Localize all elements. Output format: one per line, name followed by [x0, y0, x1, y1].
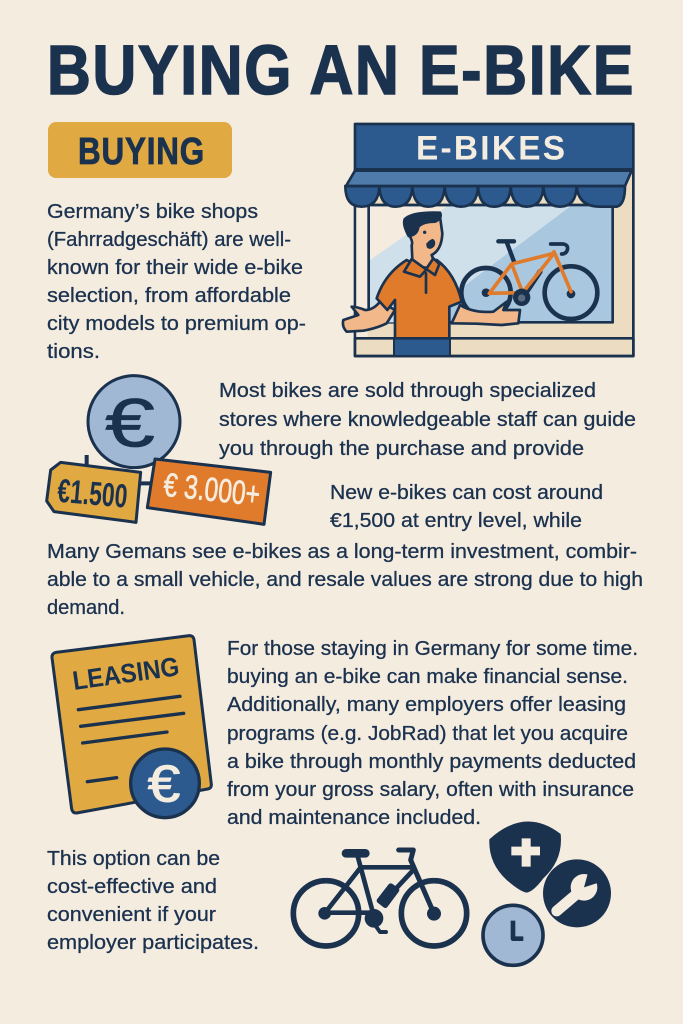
text block: long-term investment: Many Gemans see e-bikes as a long-term investment, combir-: [47, 540, 637, 563]
icon: leasing document with euro coin: [52, 636, 211, 818]
text block: bike shops: tions.: [47, 340, 100, 363]
icon: clock: [483, 905, 543, 965]
text block: employer leasing: from your gross salary, often with insurance: [227, 778, 634, 801]
text block: employer leasing: [227, 637, 638, 829]
shop wall: [355, 170, 633, 356]
shop window: [369, 205, 613, 322]
heading badge: buying: [48, 122, 232, 178]
euro coin: €: [105, 386, 155, 462]
price tag: 1.500: [47, 462, 141, 522]
euro coin: [88, 376, 180, 468]
price tag: 3.000+: € 3.000+: [162, 467, 262, 514]
text block: cost: New e-bikes can cost around: [330, 481, 603, 504]
text block: employer leasing: a bike through monthly payments deducted: [227, 750, 636, 773]
icon: wrench: [543, 859, 611, 927]
leasing label: LEASING: [71, 651, 181, 696]
salesman head: [404, 213, 442, 268]
salesman shirt: [377, 258, 462, 338]
text block: employer leasing: programs (e.g. JobRad) that let you acquire: [227, 722, 628, 745]
text block: cost-effective option: This option can be: [47, 847, 220, 870]
orange bicycle: [461, 241, 597, 319]
euro coin: [131, 749, 199, 818]
text block: long-term investment: demand.: [47, 596, 125, 619]
price tag: 1.500: €1.500: [56, 473, 129, 516]
shop sill: [355, 338, 633, 356]
document: [52, 636, 211, 813]
awning: [345, 171, 632, 207]
text block: long-term investment: able to a small vehicle, and resale values are strong due to high: [47, 568, 643, 591]
text block: employer leasing: buying an e-bike can make financial sense.: [227, 665, 628, 688]
text block: specialized stores: [219, 379, 636, 460]
text block: bike shops: known for their wide e-bike: [47, 256, 303, 279]
illustration: e-bike shop with salesman: [343, 124, 633, 356]
text block: bike shops: (Fahrradgeschäft) are well-: [47, 228, 291, 251]
salesman arms: [343, 302, 520, 332]
text block: bike shops: selection, from affordable: [47, 284, 291, 307]
icon: euro coin and price tags: [47, 376, 271, 524]
price tag: 3.000+: [147, 459, 271, 524]
text block: specialized stores: you through the purchase and provide: [219, 437, 584, 460]
text block: cost-effective option: [47, 847, 259, 954]
text block: employer leasing: Additionally, many employers offer leasing: [227, 693, 626, 716]
text block: cost: €1,500 at entry level, while: [330, 509, 582, 532]
icon: shield with plus: [489, 822, 561, 893]
text block: cost-effective option: convenient if your: [47, 903, 216, 926]
heading badge: buying: BUYING: [78, 131, 205, 173]
text block: cost: [330, 481, 603, 532]
icon: navy e-bike: [293, 850, 467, 946]
text block: bike shops: Germany’s bike shops: [47, 200, 258, 223]
text block: employer leasing: and maintenance included.: [227, 806, 481, 829]
shop sign: [355, 124, 633, 169]
euro coin: €: [148, 755, 180, 813]
salesman: [343, 213, 520, 338]
text block: bike shops: city models to premium op-: [47, 312, 306, 335]
text block: cost-effective option: cost-effective and: [47, 875, 217, 898]
text block: bike shops: [47, 200, 306, 363]
text block: employer leasing: For those staying in Germany for some time.: [227, 637, 638, 660]
text block: specialized stores: Most bikes are sold through specialized: [219, 379, 596, 402]
text block: long-term investment: [47, 540, 643, 619]
text block: cost-effective option: employer participates.: [47, 931, 259, 954]
shop sign: E-BIKES: [416, 129, 567, 167]
text block: specialized stores: stores where knowledgeable staff can guide: [219, 408, 636, 431]
